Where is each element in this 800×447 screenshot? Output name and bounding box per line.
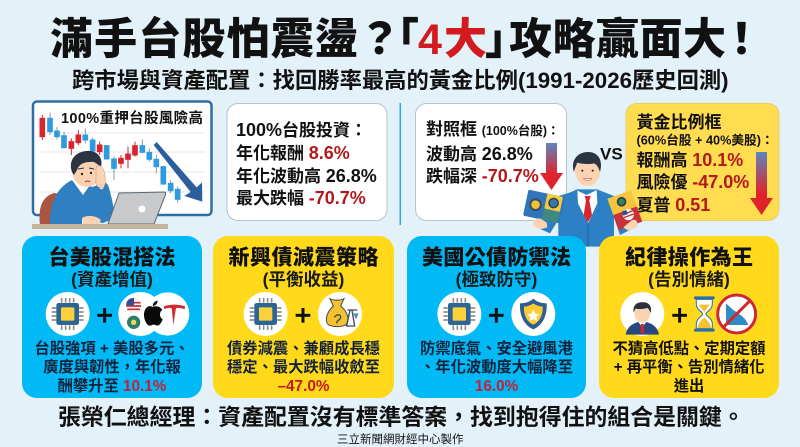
quote: 張榮仁總經理：資產配置沒有標準答案，找到抱得住的組合是關鍵。 (58, 404, 745, 430)
panel: golden ratio box (626, 104, 779, 220)
panel: 100% Taiwan stock risk chart (32, 102, 212, 229)
card: US treasury defence: 16.0% (475, 378, 519, 395)
card: Taiwan-US stock mix: 酬攀升至 10.1% (58, 377, 167, 395)
panel: 100% Taiwan stock stats: 100%台股投資： (236, 120, 367, 140)
panel: 100% Taiwan stock stats: 最大跌幅 -70.7% (236, 188, 366, 208)
card: US treasury defence: 、年化波動度大幅降至 (420, 358, 573, 376)
candlestick chart (40, 113, 180, 203)
chart heading: 100%重押台股風險高 (61, 109, 203, 127)
card body: 防禦底氣、安全避風港 (420, 340, 574, 358)
card heading: 紀律操作為王 (625, 246, 753, 270)
card: emerging bonds: 穩定、最大跌幅收斂至 (227, 358, 380, 376)
right portfolio (607, 190, 642, 230)
icon: down arrow (750, 152, 773, 215)
icon: chip plus shield (437, 292, 555, 336)
icon: worried investor at laptop (32, 151, 168, 229)
card subheading: (告別情緒) (648, 270, 730, 290)
card body: 不猜高低點、定期定額 (613, 340, 765, 358)
panel: comparison box: 對照框 (100%台股)： (426, 120, 560, 139)
left portfolio (523, 190, 565, 223)
title: ？ (358, 16, 401, 64)
card: emerging bonds (213, 236, 394, 398)
panel: comparison box: 跌幅深 -70.7% (426, 166, 539, 186)
card heading: 台美股混搭法 (48, 246, 176, 270)
credit: 三立新聞網財經中心製作 (337, 432, 464, 446)
panel: golden ratio box: 報酬高 10.1% (636, 150, 743, 170)
panel: golden ratio box: 風險優 -47.0% (636, 172, 749, 192)
card: Taiwan-US stock mix: 廣度與韌性，年化報 (43, 358, 182, 376)
panel: golden ratio box: (60%台股 + 40%美股)： (636, 132, 774, 148)
VS label: VS (600, 144, 623, 164)
panel: golden ratio box: 夏普 0.51 (636, 195, 710, 215)
card heading: 新興債減震策略 (228, 246, 378, 270)
card subheading: (資產增值) (71, 270, 153, 290)
card body: 債券減震、兼顧成長穩 (227, 340, 380, 358)
illustration: businessman holding portfolios (523, 152, 642, 247)
subtitle: 跨市場與資產配置：找回勝率最高的黃金比例(1991-2026歷史回測) (72, 67, 729, 93)
title: 4 (418, 16, 442, 64)
card: discipline: 進出 (674, 377, 704, 395)
card: emerging bonds: –47.0% (278, 378, 330, 395)
icon: chip plus money bag (244, 292, 362, 336)
title: 攻略贏面大 (509, 16, 726, 64)
panel: comparison box: 波動高 26.8% (426, 144, 533, 164)
title: 大 (444, 16, 487, 64)
icon: down arrow (540, 143, 563, 190)
card: discipline (599, 236, 779, 398)
card subheading: (極致防守) (456, 270, 537, 290)
card body: 台股強項 + 美股多元、 (34, 340, 190, 358)
icon: person plus hourglass and no-panic sign (620, 292, 757, 336)
icon: falling arrow (154, 142, 202, 202)
divider (400, 103, 401, 225)
title: 滿手台股怕震盪 (50, 15, 358, 64)
card: Taiwan-US stock mix (22, 236, 202, 398)
panel: 100% Taiwan stock stats: 年化報酬 8.6% (236, 143, 350, 163)
panel: comparison box (416, 104, 566, 220)
panel: 100% Taiwan stock stats (227, 104, 387, 220)
title: ！ (720, 16, 763, 64)
panel: 100% Taiwan stock stats: 年化波動高 26.8% (236, 166, 377, 186)
card: discipline: + 再平衡、告別情緒化 (614, 358, 764, 376)
card heading: 美國公債防禦法 (422, 246, 571, 270)
title: 「 (376, 16, 419, 64)
panel: golden ratio box: 黃金比例框 (636, 112, 722, 132)
card: US treasury defence (407, 236, 586, 398)
card subheading: (平衡收益) (263, 270, 344, 290)
title: 」 (485, 16, 528, 64)
title (50, 15, 763, 64)
icon: chip plus US stocks (46, 292, 189, 336)
